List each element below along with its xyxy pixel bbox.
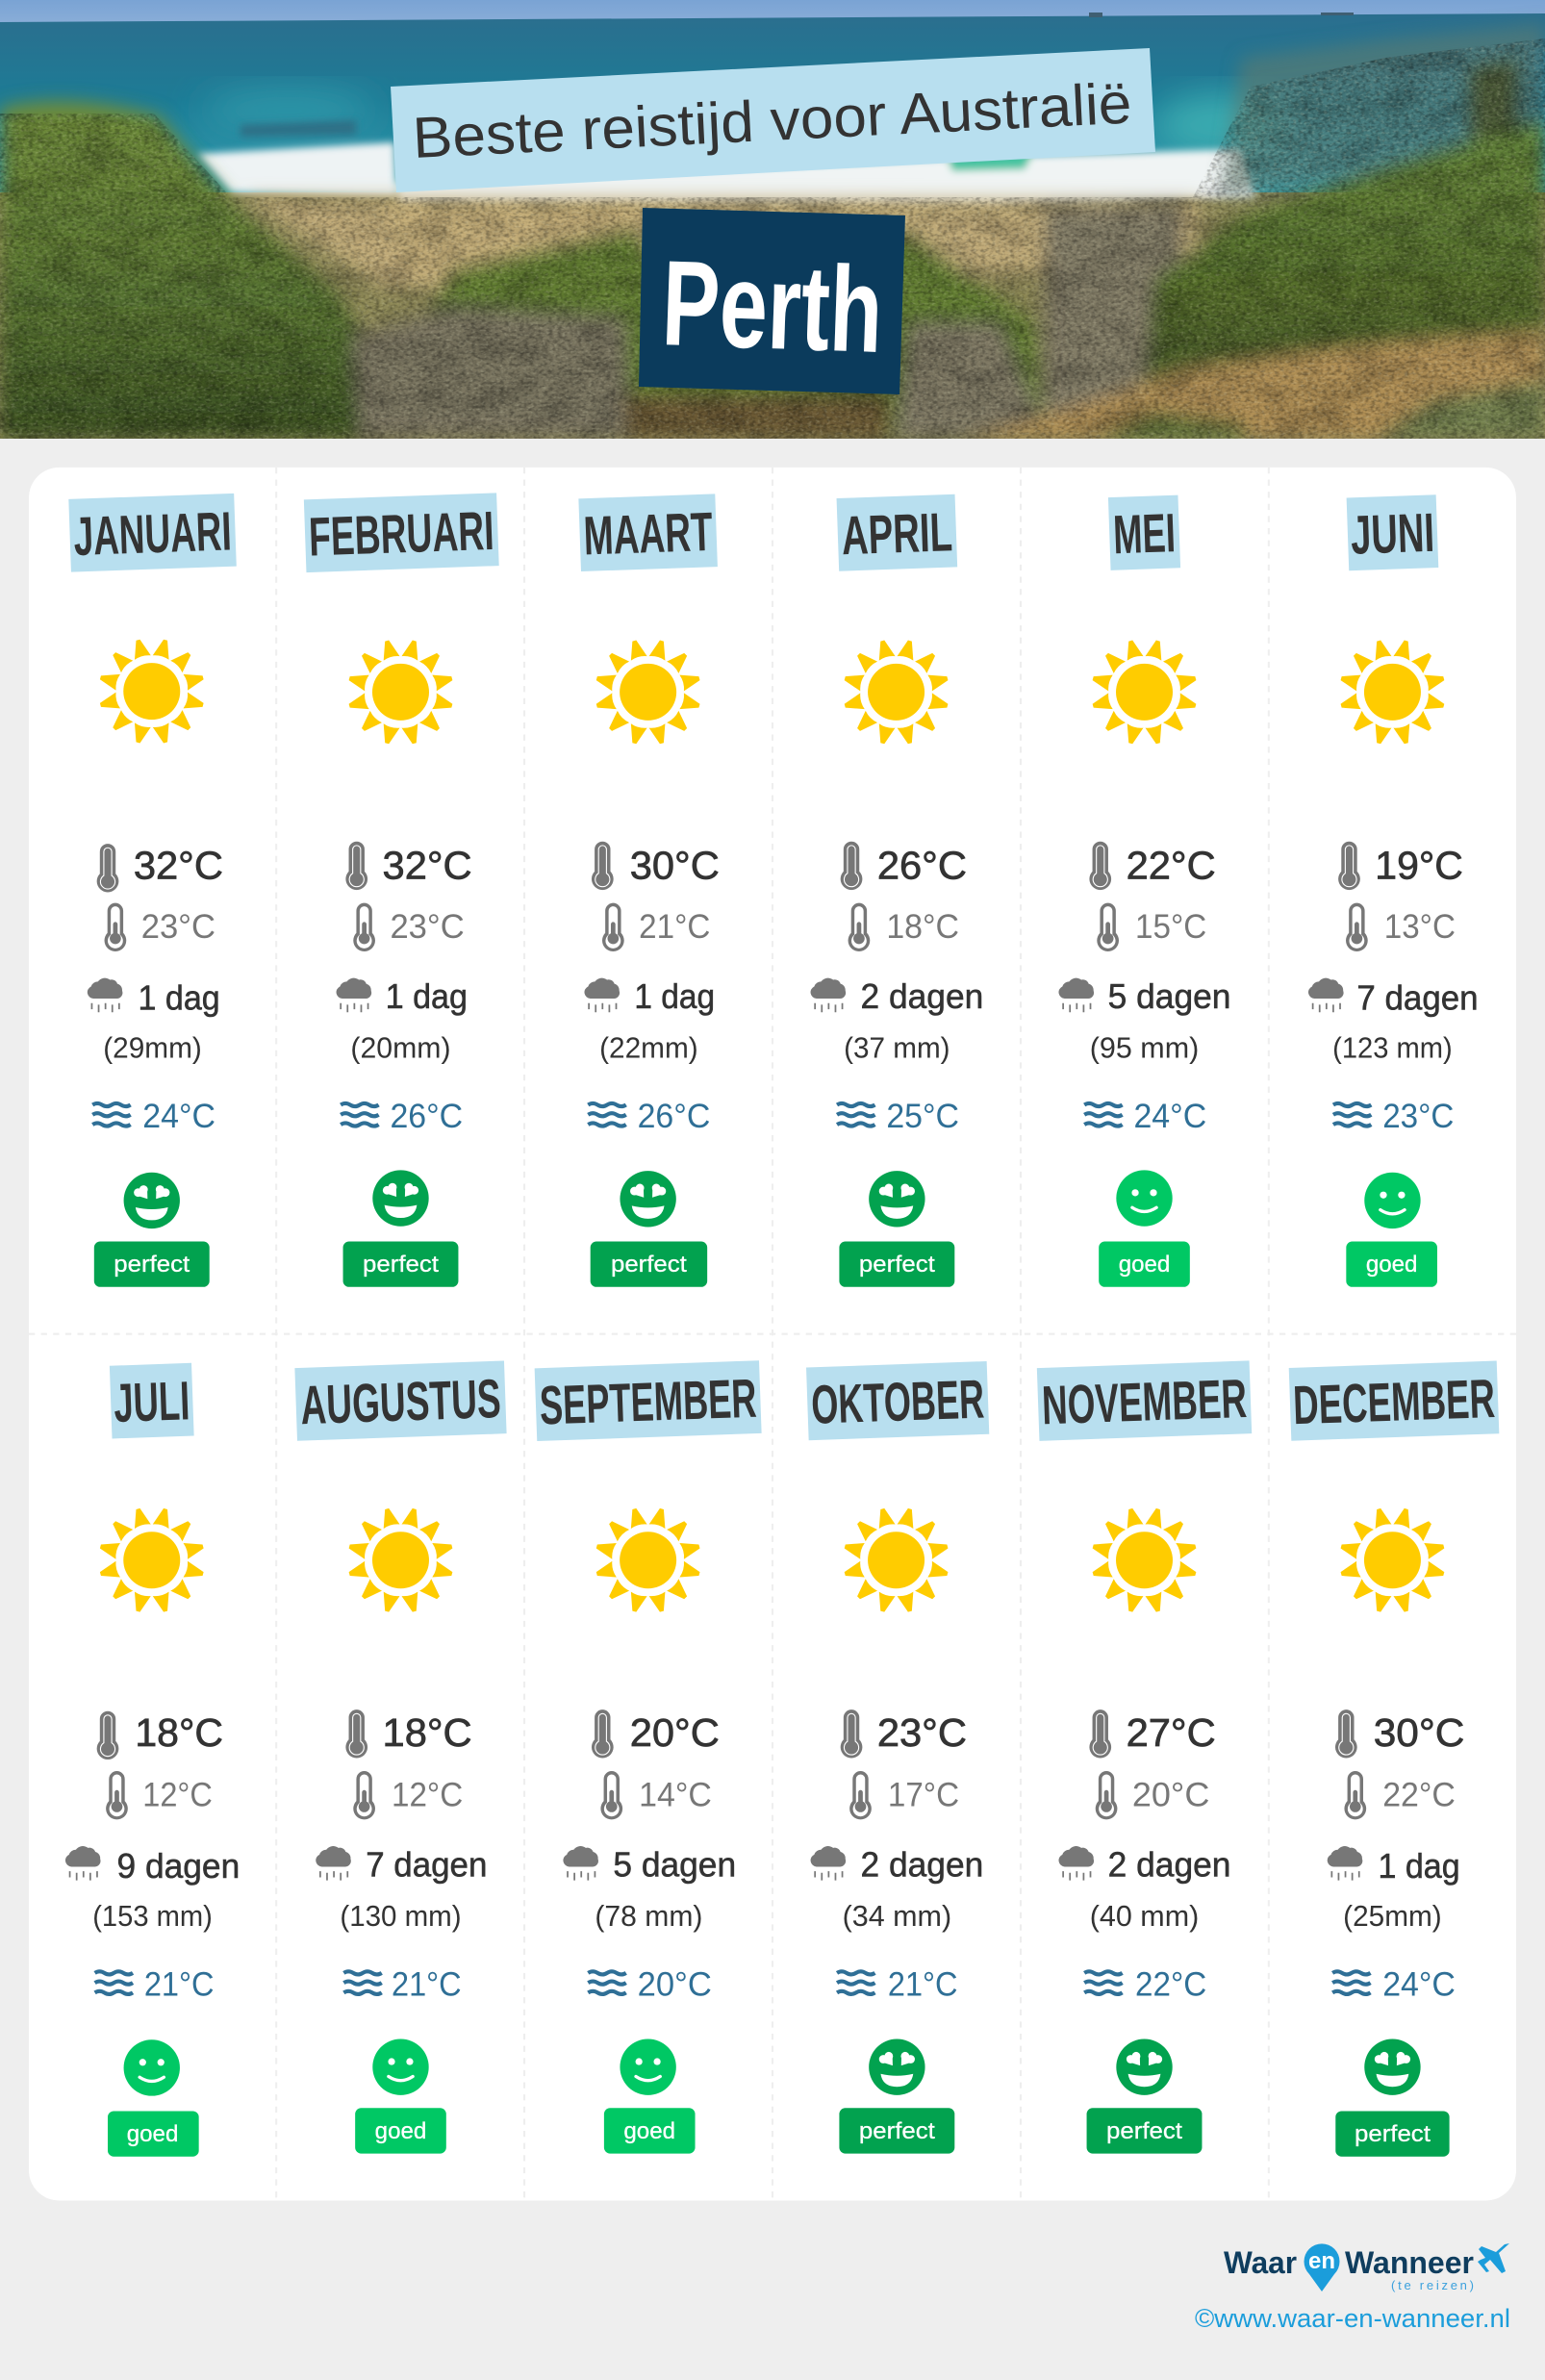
rating: perfect: perfect xyxy=(611,1252,687,1278)
sea temperature xyxy=(95,1965,214,2004)
rain days: 1 dag xyxy=(139,978,220,1018)
low temperature: 13°C xyxy=(1384,907,1456,946)
low temperature: 12°C xyxy=(142,1775,213,1813)
rain days: 5 dagen xyxy=(1108,976,1230,1016)
high temperature: 20°C xyxy=(630,1710,720,1755)
rating: goed xyxy=(108,2039,199,2157)
rainfall amount: (40 mm) xyxy=(1090,1899,1199,1933)
high temperature: 18°C xyxy=(383,1710,472,1755)
rating: goed xyxy=(1346,1173,1437,1287)
rainfall amount: (29mm) xyxy=(103,1031,202,1065)
rainfall amount: (78 mm) xyxy=(595,1899,702,1933)
cell: februari xyxy=(304,493,499,1287)
rating: perfect xyxy=(1335,2039,1450,2157)
high temperature: 27°C xyxy=(1127,1710,1216,1755)
high temperature xyxy=(1338,842,1463,890)
rain days: 2 dagen xyxy=(860,976,983,1016)
rating: goed: goed xyxy=(1366,1252,1417,1278)
rating: perfect: perfect xyxy=(1355,2121,1431,2147)
rain days xyxy=(1308,978,1479,1018)
month label: JUNI xyxy=(1350,503,1435,567)
header photo: beach with dunes xyxy=(0,0,1545,439)
sea temperature: 21°C xyxy=(144,1965,214,2004)
month label: MEI xyxy=(1112,503,1177,566)
month label xyxy=(806,1361,989,1440)
rain days xyxy=(584,976,715,1016)
icon: sun xyxy=(843,639,950,746)
sea temperature xyxy=(92,1097,215,1135)
rating: perfect: perfect xyxy=(859,2118,935,2144)
sea temperature: 21°C xyxy=(392,1965,462,2004)
high temperature: 30°C xyxy=(630,843,720,887)
sea temperature: 23°C xyxy=(1382,1097,1454,1135)
sea temperature: 21°C xyxy=(888,1965,957,2004)
rating: perfect: perfect xyxy=(859,1252,935,1278)
cell: januari xyxy=(68,494,237,1287)
sea temperature xyxy=(1084,1965,1206,2004)
low temperature: 23°C xyxy=(390,907,465,946)
low temperature xyxy=(353,903,465,951)
high temperature xyxy=(97,843,223,892)
high temperature: 19°C xyxy=(1375,843,1463,887)
rain days xyxy=(65,1846,240,1886)
high temperature xyxy=(841,1709,967,1758)
rainfall amount: (95 mm) xyxy=(1090,1031,1199,1065)
sea temperature xyxy=(1332,1965,1456,2004)
high temperature xyxy=(1089,842,1216,890)
rain days xyxy=(1328,1846,1460,1886)
month label xyxy=(110,1363,194,1438)
high temperature xyxy=(841,842,967,890)
sea temperature xyxy=(1333,1097,1454,1135)
sea temperature: 22°C xyxy=(1135,1965,1206,2004)
month label: SEPTEMBER xyxy=(539,1369,758,1437)
rainfall amount: (123 mm) xyxy=(1332,1031,1453,1065)
rating: perfect xyxy=(839,2039,954,2154)
cell: september xyxy=(535,1360,762,2154)
sea temperature: 24°C xyxy=(1133,1097,1206,1135)
cell: juli xyxy=(65,1363,240,2157)
sea temperature xyxy=(588,1097,710,1135)
rain days xyxy=(811,1845,983,1885)
rain days: 7 dagen xyxy=(366,1845,487,1885)
rainfall amount: (34 mm) xyxy=(843,1899,951,1933)
rain days xyxy=(88,978,220,1018)
sea temperature: 26°C xyxy=(638,1097,710,1135)
rating: perfect xyxy=(1087,2039,1202,2154)
rain days: 7 dagen xyxy=(1356,978,1479,1018)
low temperature xyxy=(1097,903,1206,951)
low temperature: 17°C xyxy=(888,1775,959,1813)
banner: subtitle xyxy=(391,48,1155,192)
month label: NOVEMBER xyxy=(1041,1369,1248,1436)
banner: subtitle: Beste reistijd voor Australië xyxy=(411,71,1133,170)
month label: JULI xyxy=(113,1371,190,1434)
high temperature xyxy=(97,1710,223,1760)
rating: goed xyxy=(1099,1170,1190,1287)
sea temperature: 24°C xyxy=(142,1097,215,1135)
icon: sun xyxy=(1091,1506,1198,1613)
low temperature: 22°C xyxy=(1382,1775,1456,1813)
rating: goed: goed xyxy=(1119,1252,1170,1278)
high temperature xyxy=(592,1709,720,1758)
low temperature xyxy=(105,903,215,951)
high temperature: 18°C xyxy=(135,1710,223,1755)
low temperature xyxy=(600,1771,712,1819)
rating: goed: goed xyxy=(623,2118,675,2144)
panel: months xyxy=(29,468,1516,2201)
rating: perfect xyxy=(839,1171,954,1287)
icon: sun xyxy=(843,1506,950,1613)
month label xyxy=(535,1360,762,1441)
month label xyxy=(1037,1360,1252,1441)
icon: airplane xyxy=(1478,2243,1509,2273)
low temperature xyxy=(353,1771,463,1819)
icon: sun xyxy=(98,1506,205,1613)
high temperature: 30°C xyxy=(1374,1710,1464,1755)
rain days: 2 dagen xyxy=(1108,1845,1230,1885)
rainfall amount: (22mm) xyxy=(599,1031,698,1065)
icon: map pin: en xyxy=(1308,2248,1335,2274)
sea temperature xyxy=(1084,1097,1206,1135)
cell: oktober xyxy=(806,1361,989,2154)
rating: perfect: perfect xyxy=(114,1252,190,1278)
month label xyxy=(837,494,957,571)
low temperature xyxy=(849,1771,959,1819)
month label: AUGUSTUS xyxy=(299,1369,502,1436)
cell: april xyxy=(811,494,983,1287)
title block: Perth: Perth xyxy=(660,235,885,378)
sea temperature xyxy=(837,1097,959,1135)
high temperature: 23°C xyxy=(877,1710,967,1755)
high temperature xyxy=(592,842,720,890)
sea temperature xyxy=(343,1965,462,2004)
rating: goed xyxy=(355,2039,446,2154)
low temperature xyxy=(106,1771,213,1819)
rain days xyxy=(316,1845,487,1885)
rain days: 1 dag xyxy=(1378,1846,1460,1886)
icon: sun xyxy=(595,1506,701,1613)
rain days: 1 dag xyxy=(386,976,468,1016)
high temperature: 32°C xyxy=(383,843,472,887)
icon: sun xyxy=(595,639,701,746)
low temperature: 20°C xyxy=(1132,1775,1209,1813)
high temperature xyxy=(345,842,472,890)
rain days xyxy=(337,976,468,1016)
rating: perfect xyxy=(343,1170,458,1287)
month label xyxy=(1108,495,1180,570)
rainfall amount: (20mm) xyxy=(350,1031,451,1065)
month label xyxy=(578,494,718,571)
month label: FEBRUARI xyxy=(308,501,495,569)
rating: goed: goed xyxy=(127,2121,178,2147)
cell: augustus xyxy=(294,1360,507,2154)
sea temperature xyxy=(588,1965,712,2004)
rainfall amount: (25mm) xyxy=(1343,1899,1442,1933)
low temperature: 15°C xyxy=(1135,907,1206,946)
logo: Waar en Wanneer xyxy=(1224,2243,1509,2292)
rain days: 5 dagen xyxy=(613,1845,736,1885)
high temperature xyxy=(345,1709,472,1758)
icon: sun xyxy=(347,1506,454,1613)
rain days: 2 dagen xyxy=(860,1845,983,1885)
high temperature xyxy=(1089,1709,1216,1758)
sea temperature: 24°C xyxy=(1382,1965,1456,2004)
icon: sun xyxy=(1339,1506,1446,1613)
low temperature: 18°C xyxy=(886,907,959,946)
rainfall amount: (153 mm) xyxy=(92,1899,213,1933)
month label xyxy=(1347,494,1438,570)
sea temperature: 25°C xyxy=(886,1097,959,1135)
rating: goed xyxy=(604,2039,696,2154)
rainfall amount: (130 mm) xyxy=(340,1899,462,1933)
month label: JANUARI xyxy=(73,501,233,568)
low temperature: 21°C xyxy=(639,907,710,946)
month label: MAART xyxy=(583,502,714,568)
icon: sun xyxy=(1091,639,1198,746)
rating: goed: goed xyxy=(375,2118,426,2144)
logo: Waar en Wanneer: Waar xyxy=(1224,2245,1297,2280)
cell: juni xyxy=(1308,494,1479,1287)
rating: perfect: perfect xyxy=(363,1252,439,1278)
low temperature: 23°C xyxy=(141,907,215,946)
sea temperature xyxy=(837,1965,957,2004)
month label: APRIL xyxy=(841,502,953,567)
rain days xyxy=(811,976,983,1016)
rating: perfect xyxy=(94,1173,210,1287)
cell: mei xyxy=(1058,495,1230,1287)
rain days: 9 dagen xyxy=(116,1846,240,1886)
website credit: ©www.waar-en-wanneer.nl xyxy=(1195,2304,1510,2333)
sea temperature xyxy=(341,1097,463,1135)
low temperature xyxy=(848,903,959,951)
low temperature xyxy=(1344,1771,1456,1819)
rating: perfect xyxy=(591,1171,707,1287)
title block: Perth xyxy=(639,208,905,394)
icon: sun xyxy=(347,639,454,746)
logo: Waar en Wanneer: (te reizen) xyxy=(1391,2278,1474,2292)
logo: Waar en Wanneer: Wanneer xyxy=(1345,2245,1474,2280)
cell: november xyxy=(1037,1360,1252,2154)
rain days xyxy=(563,1845,736,1885)
month label: OKTOBER xyxy=(810,1370,985,1436)
month label xyxy=(304,493,499,572)
low temperature xyxy=(1346,903,1456,951)
rainfall amount: (37 mm) xyxy=(844,1031,950,1065)
sea temperature: 20°C xyxy=(638,1965,712,2004)
cell: maart xyxy=(578,494,720,1287)
rain days: 1 dag xyxy=(634,976,715,1016)
icon: sun xyxy=(1339,639,1446,746)
month label xyxy=(294,1360,507,1441)
icon: sun xyxy=(98,638,205,745)
month label xyxy=(68,494,237,572)
high temperature: 32°C xyxy=(134,843,223,887)
high temperature: 26°C xyxy=(877,843,967,887)
sea temperature: 26°C xyxy=(390,1097,463,1135)
low temperature: 14°C xyxy=(639,1775,712,1813)
low temperature xyxy=(1096,1771,1209,1819)
low temperature xyxy=(602,903,710,951)
cell: december xyxy=(1289,1361,1499,2157)
high temperature: 22°C xyxy=(1127,843,1216,887)
high temperature xyxy=(1335,1709,1464,1758)
icon: map pin xyxy=(1304,2243,1339,2291)
low temperature: 12°C xyxy=(392,1775,463,1813)
rating: perfect: perfect xyxy=(1106,2118,1182,2144)
